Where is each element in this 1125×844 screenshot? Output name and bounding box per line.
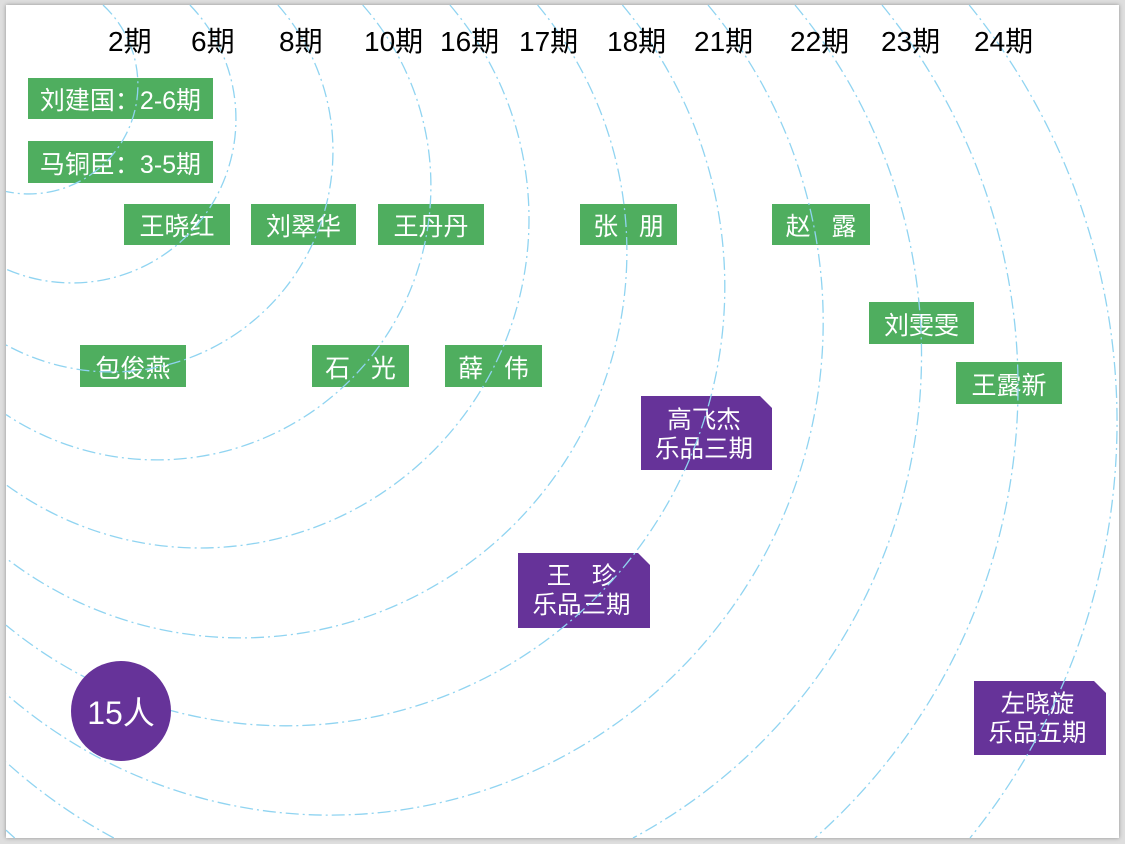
heading: 8期: 8期 [279, 26, 323, 57]
label: 王晓红: 王晓红 [139, 213, 214, 241]
label: 张朋: 张 朋 [593, 213, 664, 241]
badge: 15人 [71, 661, 171, 761]
label: 刘雯雯: 刘雯雯 [884, 312, 959, 340]
heading: 16期: 16期 [440, 26, 499, 57]
label: 王露新: 王露新 [971, 372, 1046, 400]
label: 王晓红 [124, 204, 230, 245]
label: 刘翠华: 刘翠华 [266, 213, 341, 241]
heading: 17期: 17期 [519, 26, 578, 57]
callout: 高飞杰 乐品三期 [641, 396, 772, 470]
callout: 王珍 乐品三期: 王 珍 乐品三期 [532, 563, 630, 619]
label: 石光 [312, 345, 409, 387]
heading: 22期: 22期 [790, 26, 849, 57]
label: 王露新 [956, 362, 1062, 404]
label: 赵露: 赵 露 [786, 213, 856, 241]
callout: 左晓旋 乐品五期: 左晓旋 乐品五期 [988, 690, 1086, 746]
label: 薛伟: 薛 伟 [458, 354, 529, 382]
label: 刘翠华 [251, 204, 356, 245]
label: 包俊燕: 包俊燕 [95, 354, 170, 382]
callout: 王珍 乐品三期 [518, 553, 650, 628]
label: 马铜臣: 马铜臣：3-5期 [40, 150, 201, 178]
label: 张朋 [580, 204, 677, 245]
callout: 左晓旋 乐品五期 [974, 681, 1106, 755]
label: 王丹丹 [378, 204, 484, 245]
callout: 高飞杰 乐品三期: 高飞杰 乐品三期 [655, 406, 753, 462]
label: 王丹丹: 王丹丹 [393, 213, 468, 241]
label: 刘建国 [28, 78, 213, 119]
label: 包俊燕 [80, 345, 186, 387]
label: 刘建国: 刘建国：2-6期 [40, 87, 201, 115]
heading: 10期: 10期 [364, 26, 423, 57]
heading: 18期: 18期 [607, 26, 666, 57]
label: 马铜臣 [28, 141, 213, 183]
heading: 2期: 2期 [108, 26, 152, 57]
heading: 21期: 21期 [694, 26, 753, 57]
label: 薛伟 [445, 345, 542, 387]
heading: 23期: 23期 [881, 26, 940, 57]
heading: 24期: 24期 [974, 26, 1033, 57]
label: 刘雯雯 [869, 302, 974, 344]
heading: 6期: 6期 [191, 26, 235, 57]
label: 石光: 石 光 [325, 354, 396, 382]
badge: 15人: 15人 [87, 695, 155, 731]
label: 赵露 [772, 204, 870, 245]
